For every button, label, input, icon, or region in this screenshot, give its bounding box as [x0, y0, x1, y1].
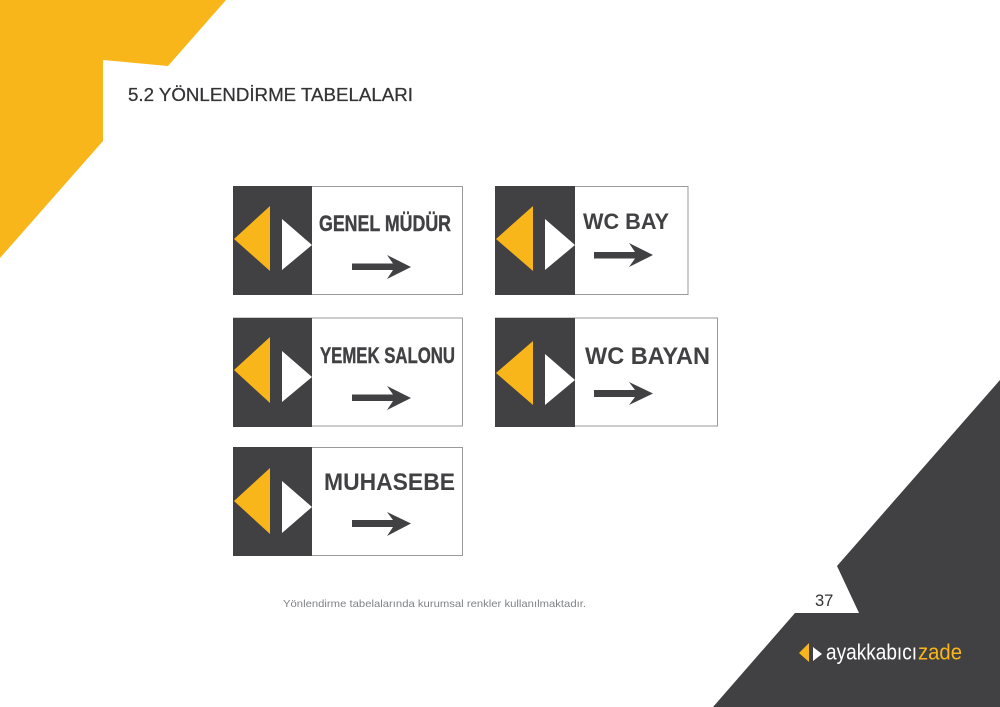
icon: logo right triangle [813, 647, 822, 661]
yellow corner shape [0, 0, 226, 258]
title: 5.2 YÖNLENDİRME TABELALARI [128, 84, 413, 105]
logo wordmark: ayakkabıcı [826, 640, 917, 664]
sign: Muhasebe [233, 447, 462, 556]
logo wordmark accent: zade [918, 640, 962, 664]
page number: 37 [815, 592, 833, 610]
sign: Yemek Salonu: YEMEK SALONU [320, 343, 455, 368]
sign: WC Bay: WC BAY [583, 209, 669, 234]
sign: WC Bayan [495, 318, 718, 427]
caption: Yönlendirme tabelalarında kurumsal renkler kullanılmaktadır. [283, 598, 586, 610]
dark corner shape [713, 380, 1000, 707]
sign: Genel Müdür: GENEL MÜDÜR [319, 211, 451, 236]
sign: WC Bay [495, 186, 688, 295]
icon: logo left triangle [799, 643, 809, 662]
sign: WC Bayan: WC BAYAN [585, 343, 710, 370]
sign: Yemek Salonu [233, 318, 462, 427]
sign: Muhasebe: MUHASEBE [324, 469, 455, 496]
logo [799, 640, 962, 664]
sign: Genel Müdür [233, 186, 462, 295]
